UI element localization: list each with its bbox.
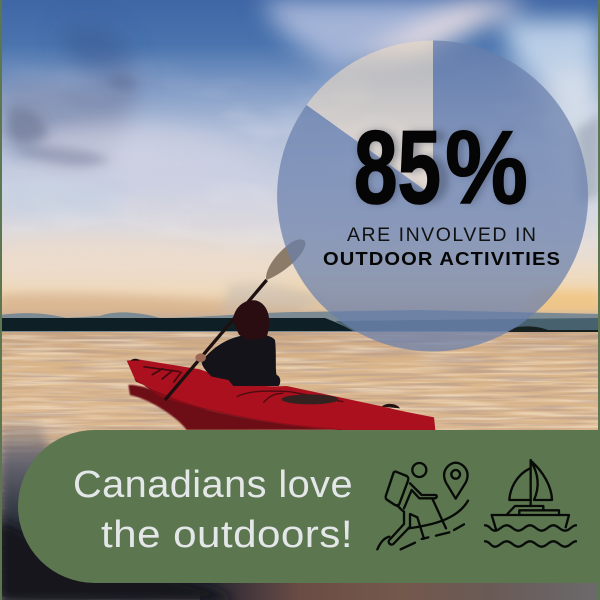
banner headline: Canadians love <box>73 464 353 506</box>
statistic: 85%: 85% <box>354 110 528 226</box>
panel: green banner <box>18 430 600 583</box>
statistic: 85%: % <box>445 110 528 226</box>
icon: sailboat on waves <box>485 460 576 547</box>
red kayak <box>127 359 435 430</box>
caption: ARE INVOLVED IN <box>347 224 536 246</box>
pie remainder wedge <box>306 40 433 196</box>
paddle <box>165 239 305 400</box>
kayak reflection <box>128 385 343 430</box>
distant hills and shoreline <box>0 310 600 332</box>
banner headline <box>73 464 353 556</box>
water <box>0 332 600 600</box>
paddler <box>195 300 280 386</box>
sky <box>0 0 600 320</box>
caption: OUTDOOR ACTIVITIES <box>323 248 561 269</box>
icon: hiker with map pin <box>377 463 468 549</box>
kayak and paddler <box>127 239 435 430</box>
banner headline: the outdoors! <box>101 514 353 556</box>
side strips <box>0 0 2 600</box>
caption <box>323 224 561 269</box>
pie 85 percent slice <box>277 40 588 351</box>
statistic: 85%: 85 <box>354 110 441 226</box>
pie chart: 85 percent <box>277 40 588 351</box>
